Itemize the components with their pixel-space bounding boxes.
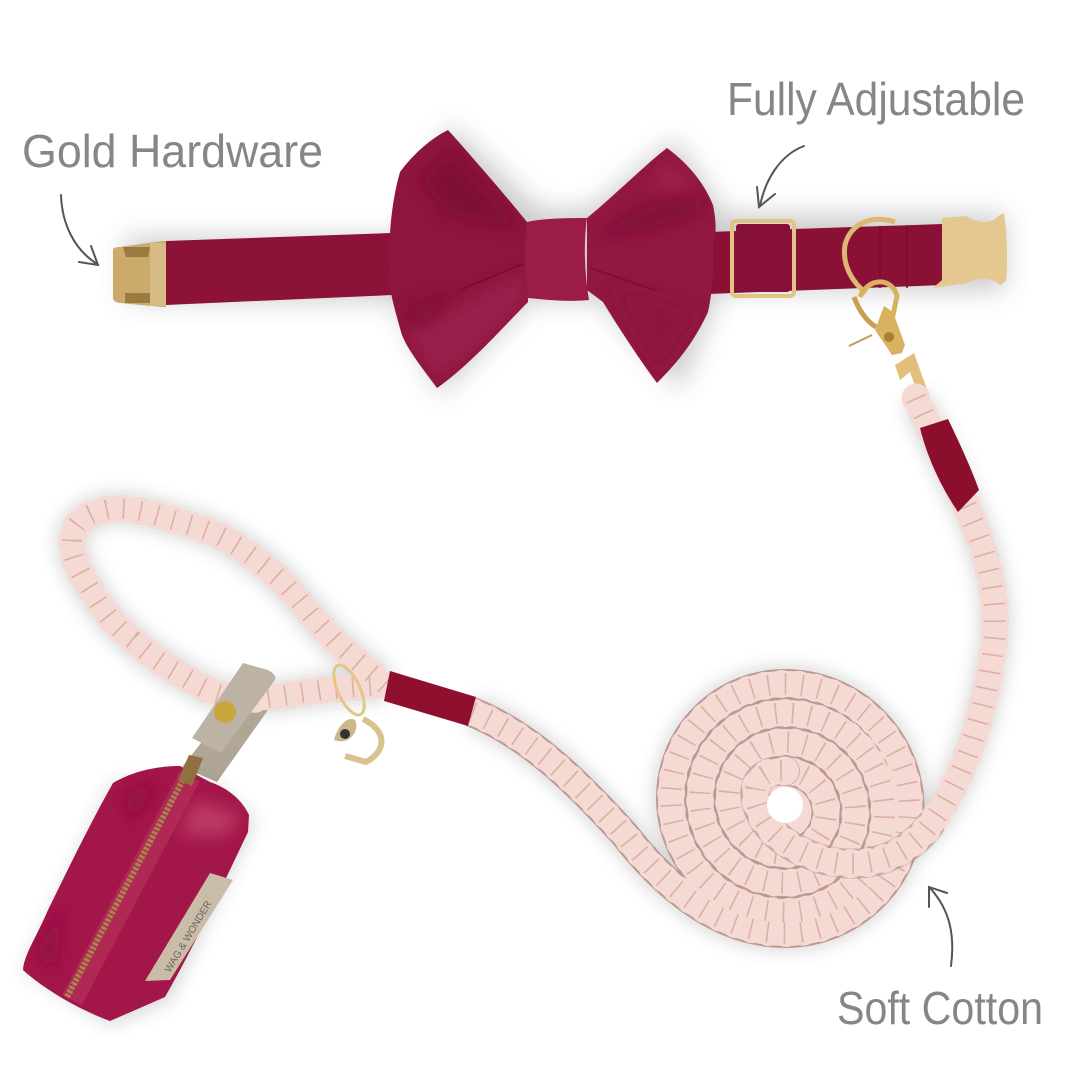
- arrow to gold hardware: [61, 195, 98, 265]
- leash rope: [72, 398, 995, 933]
- arrow to rope: [929, 887, 952, 966]
- D ring: [844, 219, 895, 293]
- hand loop: [72, 508, 385, 699]
- brand label: [145, 873, 233, 981]
- bow tie: [390, 130, 716, 388]
- coil of rope: [472, 684, 909, 933]
- lobster clasp: [849, 282, 930, 402]
- zipper: [67, 780, 183, 997]
- poop bag pouch: [15, 663, 275, 1025]
- left strap: [166, 233, 392, 305]
- rope shadow: [72, 398, 995, 933]
- leather tab: [192, 663, 275, 753]
- brand label: WAG & WONDER: [163, 899, 214, 975]
- left wing: [390, 130, 528, 388]
- slider ring: [732, 221, 794, 296]
- right strap folds: [880, 226, 907, 288]
- right strap: [708, 224, 943, 294]
- upper burgundy wrap: [920, 419, 979, 512]
- arrow to slider: [757, 146, 804, 207]
- charm: [328, 661, 381, 762]
- hole in coil: [767, 787, 803, 823]
- side release buckle: [933, 213, 1007, 288]
- label: Gold Hardware: Gold Hardware: [22, 125, 323, 177]
- collar with bow tie: [113, 120, 1007, 402]
- top strand: [755, 398, 995, 864]
- right wing: [587, 148, 716, 383]
- pouch body: [15, 760, 255, 1025]
- zipper pull: [178, 755, 203, 786]
- pouch strap under rope: [182, 688, 275, 782]
- label: Soft Cotton: Soft Cotton: [837, 982, 1043, 1034]
- zipper tape: [72, 776, 190, 1000]
- pouch shadow: [25, 782, 255, 1025]
- label: Fully Adjustable: Fully Adjustable: [727, 73, 1025, 125]
- knot: [525, 218, 589, 301]
- lower burgundy wrap: [384, 671, 476, 726]
- left metal tip: [113, 241, 166, 307]
- collar shadow: [125, 125, 1005, 395]
